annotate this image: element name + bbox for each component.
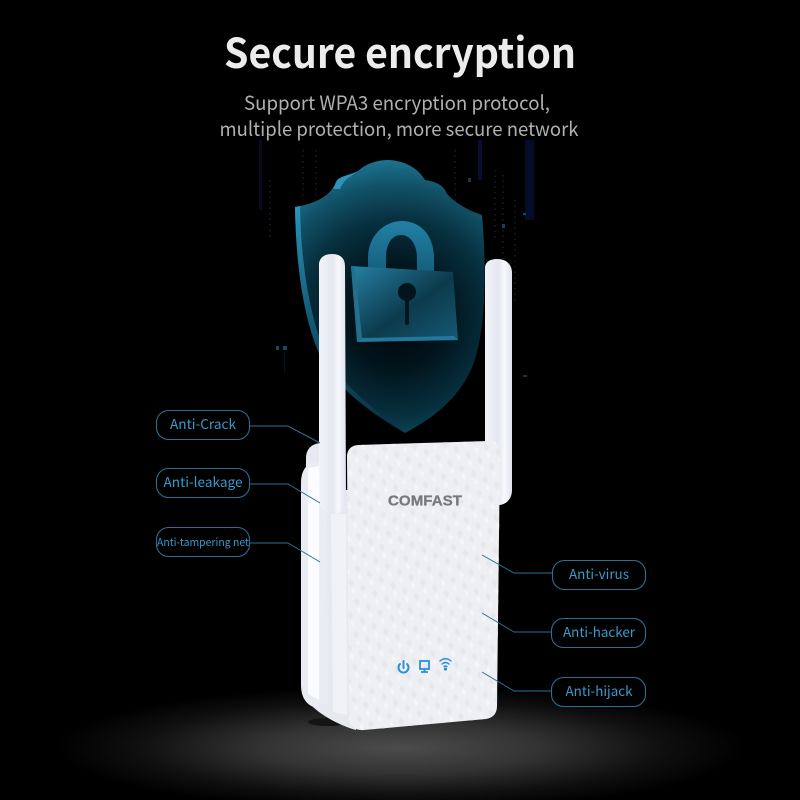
- icon: shield with padlock: [295, 160, 485, 433]
- icon: power: [398, 661, 409, 673]
- callout: Anti-hacker: Anti-hacker: [563, 621, 636, 641]
- left side fold-out antenna: [301, 463, 328, 708]
- icon: wifi: [440, 659, 451, 670]
- right antenna: [485, 259, 512, 505]
- subtitle: [220, 87, 579, 142]
- callout: Anti-leakage: [156, 468, 320, 503]
- callout: Anti-Crack: Anti-Crack: [170, 413, 237, 433]
- subtitle: Support WPA3 encryption protocol,: [244, 87, 550, 116]
- router side body: [313, 490, 356, 730]
- callout: Anti-hijack: [482, 672, 646, 706]
- callout: Anti-virus: [482, 555, 646, 590]
- front panel: [347, 441, 500, 730]
- rear fold-out antenna: [306, 443, 340, 480]
- icon: network: [420, 661, 429, 672]
- floor shadow: [308, 718, 348, 726]
- callout: Anti-leakage: Anti-leakage: [164, 471, 242, 491]
- digital rain background: [259, 140, 534, 377]
- router: [301, 254, 512, 730]
- callout: Anti-virus: Anti-virus: [569, 563, 629, 583]
- floor glow: [55, 686, 745, 800]
- callout: Anti-Crack: [156, 410, 320, 443]
- padlock: [351, 221, 458, 342]
- subtitle: multiple protection, more secure network: [220, 113, 579, 142]
- title: Secure encryption: [224, 20, 576, 80]
- callout: Anti-hijack: Anti-hijack: [566, 680, 633, 700]
- logo: COMFAST: [388, 492, 462, 510]
- callout: Anti-hacker: [482, 613, 646, 648]
- callout: Anti-tampering net: [156, 528, 320, 562]
- left antenna: [319, 254, 346, 514]
- callout: Anti-tampering net: Anti-tampering net: [157, 534, 249, 550]
